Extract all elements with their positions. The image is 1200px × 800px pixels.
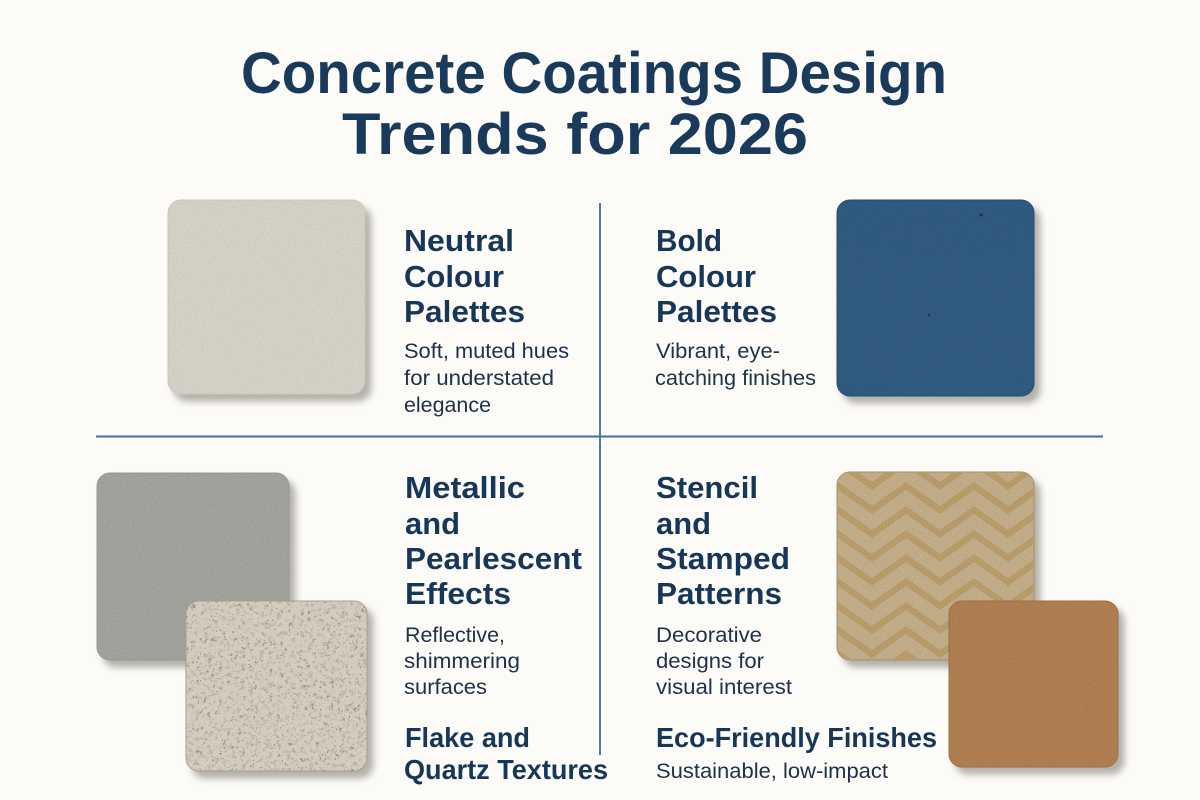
heading: neutral colour palettes — [404, 223, 525, 329]
heading: bold colour palettes: Colour — [656, 259, 756, 294]
panel: stencil and stamped patterns — [656, 470, 1034, 699]
description: bold: Vibrant, eye- — [656, 339, 780, 363]
heading: neutral colour palettes: Palettes — [404, 294, 525, 329]
horizontal divider — [96, 436, 1103, 438]
heading: bold colour palettes: Bold — [656, 223, 722, 258]
heading: neutral colour palettes: Neutral — [404, 223, 514, 258]
panel: eco-friendly finishes — [656, 601, 1118, 783]
title — [241, 41, 947, 167]
description: metallic: Reflective, — [405, 623, 505, 647]
description: neutral: Soft, muted hues — [404, 339, 569, 363]
title: Trends for 2026 — [342, 102, 808, 167]
description: bold — [655, 339, 816, 390]
swatch: metallic grey — [97, 473, 289, 660]
description: eco-friendly: Sustainable, low-impact — [656, 759, 888, 783]
heading: metallic and pearlescent effects: Effects — [405, 576, 511, 611]
panel: neutral colour palettes — [168, 200, 569, 417]
panel: bold colour palettes — [655, 200, 1034, 396]
heading: flake and quartz textures: Quartz Textures — [404, 754, 608, 785]
description: metallic: shimmering — [404, 649, 520, 673]
heading: bold colour palettes — [656, 223, 777, 329]
heading: metallic and pearlescent effects: and — [405, 506, 460, 541]
title: Concrete Coatings Design — [241, 41, 947, 106]
description: stencil: designs for — [656, 649, 764, 673]
panel: flake and quartz textures — [186, 601, 608, 785]
description: neutral: elegance — [404, 393, 491, 417]
swatch: deep blue — [837, 200, 1034, 396]
heading: stencil and stamped patterns: Patterns — [656, 576, 782, 611]
heading: flake and quartz textures: Flake and — [405, 722, 530, 753]
description: stencil — [656, 623, 792, 699]
heading: neutral colour palettes: Colour — [404, 259, 504, 294]
heading: metallic and pearlescent effects: Pearlescent — [405, 541, 582, 576]
swatch: terracotta — [949, 601, 1118, 767]
heading: flake and quartz textures — [404, 722, 608, 785]
description: metallic — [404, 623, 520, 699]
heading: eco-friendly finishes: Eco-Friendly Finishes — [656, 722, 937, 753]
description: bold: catching finishes — [655, 366, 816, 390]
description: stencil: Decorative — [656, 623, 762, 647]
heading: stencil and stamped patterns: and — [656, 506, 711, 541]
description: neutral — [404, 339, 569, 417]
heading: stencil and stamped patterns — [656, 470, 790, 611]
heading: stencil and stamped patterns: Stamped — [656, 541, 790, 576]
description: stencil: visual interest — [656, 675, 792, 699]
panel: metallic and pearlescent effects — [97, 470, 582, 699]
swatch: speckled quartz — [186, 601, 367, 771]
swatch: neutral stone — [168, 200, 365, 394]
description: neutral: for understated — [404, 366, 554, 390]
vertical divider — [599, 203, 601, 755]
heading: metallic and pearlescent effects: Metallic — [405, 470, 525, 505]
description: metallic: surfaces — [404, 675, 487, 699]
swatch: chevron stamped — [837, 472, 1034, 660]
heading: metallic and pearlescent effects — [405, 470, 582, 611]
heading: bold colour palettes: Palettes — [656, 294, 777, 329]
heading: stencil and stamped patterns: Stencil — [656, 470, 758, 505]
